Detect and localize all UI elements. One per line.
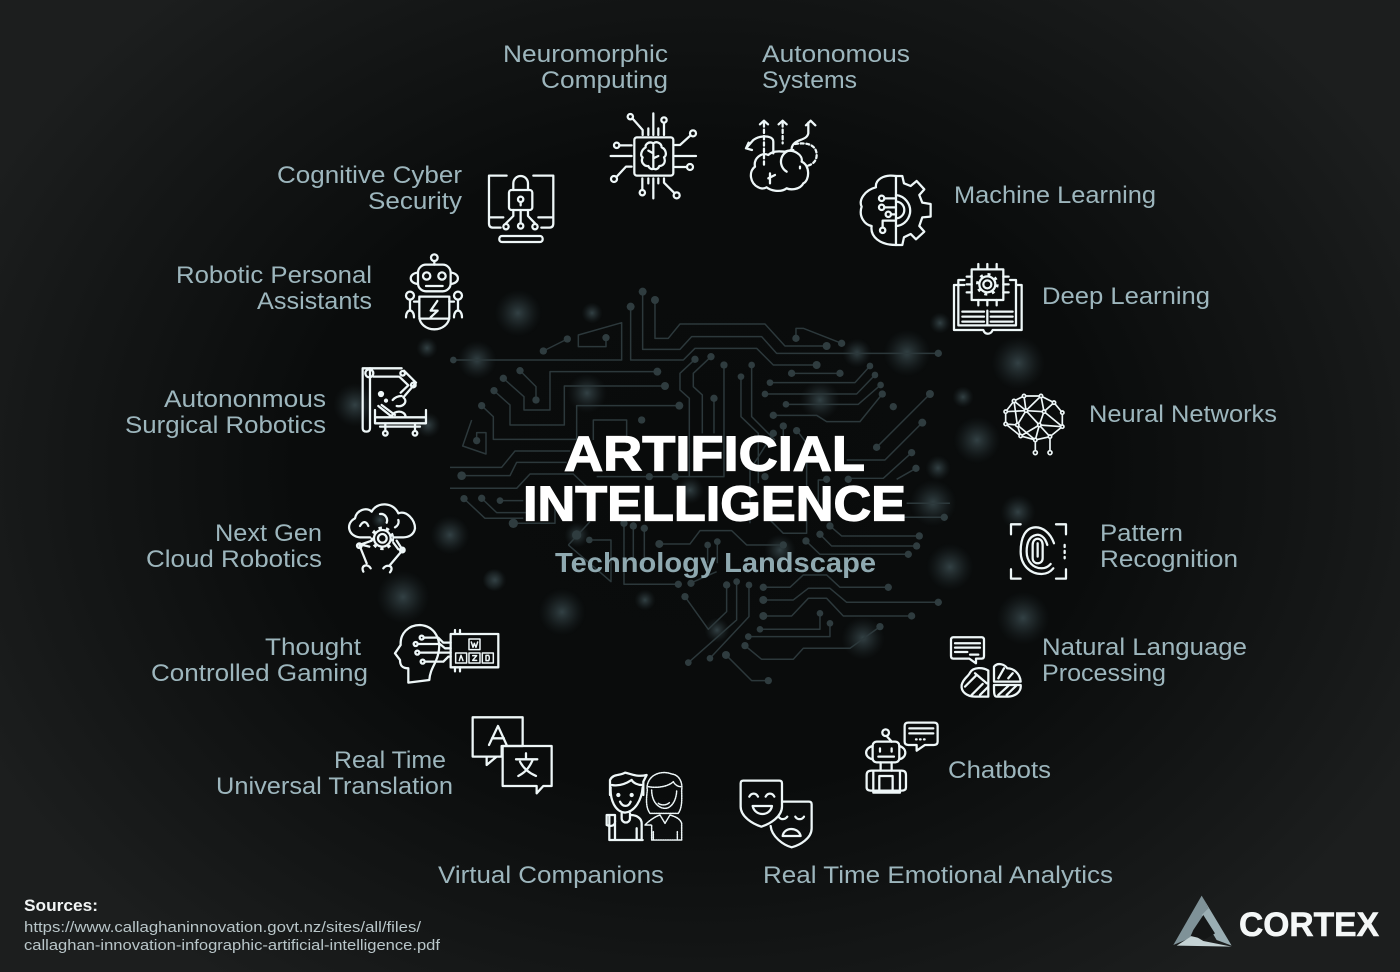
label: Cognitive Cyber Security: Security [368,188,462,215]
icon: robot assistant [406,254,462,329]
label: Thought Controlled Gaming: Thought [265,634,361,661]
sources [24,896,441,954]
icon: natural language processing [951,637,1021,697]
sources: Sources: [24,896,98,915]
label: Autonomous Systems: Autonomous [762,41,910,68]
label: Autonomous Systems [762,41,910,94]
subtitle: Technology Landscape [555,547,876,578]
label: Virtual Companions: Virtual Companions [438,862,664,889]
background glow spots [333,289,1050,660]
label: Cognitive Cyber Security: Cognitive Cyber [277,162,462,189]
icon: machine learning brain gear [861,176,931,245]
title: ARTIFICIAL [564,428,865,482]
label: Natural Language Processing: Processing [1042,660,1166,687]
label: Robotic Personal Assistants [176,262,372,315]
icon: fingerprint [1011,524,1066,579]
label: Cognitive Cyber Security [277,162,462,215]
label: Neuromorphic Computing: Neuromorphic [503,41,668,68]
icon: theatre masks [741,781,812,847]
label: Natural Language Processing [1042,634,1247,687]
icon: translation bubbles [473,717,552,793]
label: Next Gen Cloud Robotics: Cloud Robotics [146,546,322,573]
label: Next Gen Cloud Robotics: Next Gen [215,520,322,547]
icon: autonomous systems brain [746,121,817,191]
label: Neural Networks: Neural Networks [1089,401,1277,428]
label: Real Time Emotional Analytics: Real Time Emotional Analytics [763,862,1113,889]
label: Autononmous Surgical Robotics: Surgical Robotics [125,412,326,439]
label: Thought Controlled Gaming [151,634,368,687]
icon: thought controlled gaming [395,625,498,683]
label: Pattern Recognition: Recognition [1100,546,1238,573]
label: Robotic Personal Assistants: Assistants [257,288,372,315]
logo: Cortex triangle [1173,896,1232,947]
sources: https://www.callaghaninnovation.govt.nz/sites/all/files/ [24,919,422,936]
icon: cyber security monitor [489,176,553,242]
title: INTELLIGENCE [523,478,906,532]
label: Pattern Recognition [1100,520,1238,573]
label: Deep Learning: Deep Learning [1042,283,1210,310]
logo: Cortex wordmark: CORTEX [1239,906,1379,944]
icon: virtual companions [607,773,682,840]
label: Machine Learning: Machine Learning [954,182,1156,209]
icon: surgical robot [363,368,426,436]
label: Neuromorphic Computing [503,41,668,94]
label: Robotic Personal Assistants: Robotic Personal [176,262,372,289]
label: Natural Language Processing: Natural Language [1042,634,1247,661]
label: Real Time Universal Translation: Real Time [334,747,446,774]
icon: neuromorphic chip [611,113,696,198]
icon: cloud robotics [349,504,415,572]
label: Next Gen Cloud Robotics [146,520,322,573]
circuit brain [450,288,950,684]
label: Pattern Recognition: Pattern [1100,520,1183,547]
label: Autonomous Systems: Systems [762,67,857,94]
title [523,428,906,532]
label: Thought Controlled Gaming: Controlled Gaming [151,660,368,687]
sources: callaghan-innovation-infographic-artificial-intelligence.pdf [24,937,441,954]
icon: deep learning book [954,264,1022,334]
label: Autononmous Surgical Robotics [125,386,326,439]
label: Autononmous Surgical Robotics: Autononmous [164,386,326,413]
icon: neural network brain [1004,394,1064,455]
label: Real Time Universal Translation: Universal Translation [216,773,453,800]
label: Chatbots: Chatbots [948,757,1051,784]
icon: chatbot [866,723,938,793]
label: Neuromorphic Computing: Computing [541,67,668,94]
label: Real Time Universal Translation [216,747,453,800]
